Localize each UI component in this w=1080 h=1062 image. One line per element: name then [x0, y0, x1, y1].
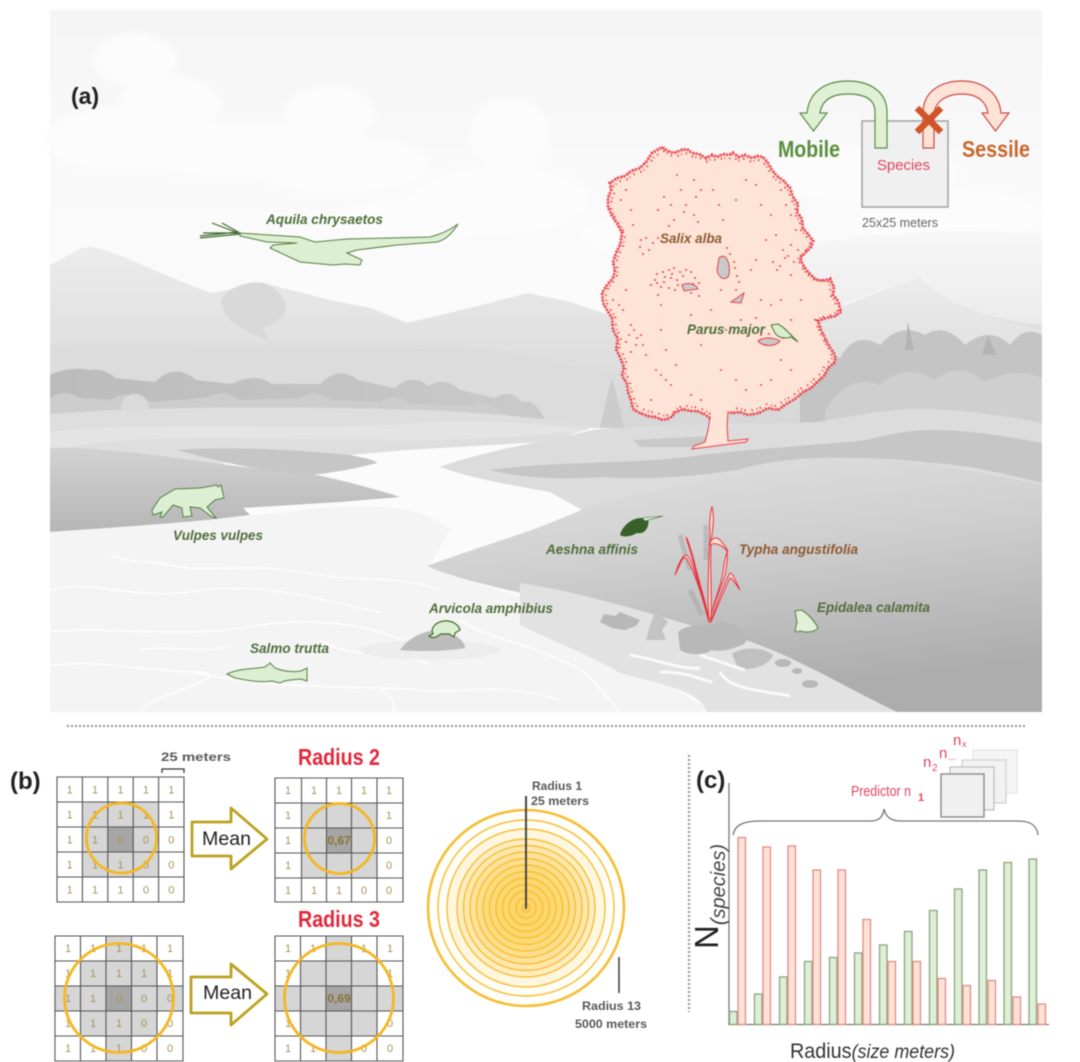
grid: radius 2 output: 1: [285, 785, 291, 797]
grid: radius 2 input: 1: [67, 784, 73, 796]
icon: Parus major bird: [771, 324, 798, 342]
species label: Arvicola amphibius: Arvicola amphibius: [428, 600, 553, 616]
predictor labels: n: [939, 745, 947, 762]
grid: radius 3 output: 1: [361, 943, 367, 955]
grid: radius 2 output: 1: [285, 810, 291, 822]
arrow: mobile: [800, 81, 887, 148]
grid: radius 2 output: 1: [386, 785, 392, 797]
grid: radius 3 output: 1: [285, 1018, 291, 1030]
bar chart: [729, 783, 1049, 1024]
grid: radius 3 input: 0: [167, 993, 173, 1005]
grid: radius 2 output: 1: [285, 860, 291, 872]
arrow: mean radius 3: Mean: [203, 983, 252, 1004]
grid: radius 3 input: 0: [167, 1043, 173, 1055]
icon: vole Arvicola amphibius: [429, 621, 460, 638]
grid: radius 2 input: 1: [168, 784, 174, 796]
grid: radius 3 input: 1: [167, 943, 173, 955]
grid: radius 2 output: 1: [386, 810, 392, 822]
panel label c: (c): [696, 767, 725, 794]
canopy inner speckled edge: [606, 151, 837, 416]
grid: radius 3 input: 0: [167, 1018, 173, 1030]
label: radius 13: [575, 999, 647, 1031]
species label: Typha angustifolia: Typha angustifolia: [739, 541, 858, 557]
grid: radius 2 output: 1: [361, 785, 367, 797]
grid: radius 3 output: 1: [285, 943, 291, 955]
radius 13 pointer: [618, 957, 620, 993]
panel label b: (b): [10, 768, 41, 795]
brace: [733, 809, 1038, 835]
rings: [428, 810, 624, 1006]
grid: radius 3 output: 0: [387, 1018, 393, 1030]
arrow: mean radius 2: [192, 808, 267, 869]
species label: Epidalea calamita: Epidalea calamita: [817, 599, 930, 615]
meadow lighter band: [50, 422, 590, 450]
label: Sessile: Sessile: [962, 136, 1030, 162]
meadow left: [50, 407, 593, 470]
label: radius 13: 5000 meters: [575, 1017, 647, 1031]
radius 1 pointer: [525, 796, 527, 909]
species label: Aquila chrysaetos: Aquila chrysaetos: [265, 211, 383, 227]
grid: radius 2 output: 1: [285, 835, 291, 847]
predictor labels: n: [923, 754, 931, 771]
grid: radius 2 input: 1: [92, 810, 98, 822]
grid: radius 3 input: 1: [90, 993, 96, 1005]
grid: radius 3 output: 0: [361, 1043, 367, 1055]
grid: radius 2 output: [275, 778, 403, 902]
grid: radius 3 output: 0,69: [327, 992, 351, 1006]
grid: radius 2 input: 1: [92, 834, 98, 846]
label: Mobile: Mobile: [778, 136, 840, 162]
predictor labels: 2: [932, 763, 938, 774]
grid: radius 3 input: 0: [141, 993, 147, 1005]
vole rock: [400, 630, 465, 651]
shore strip: [520, 583, 897, 712]
grid: radius 3 input: 1: [90, 968, 96, 980]
y axis label: (species): [708, 844, 730, 925]
grid: radius 3 output: 1: [310, 943, 316, 955]
grid: radius 3 input: 1: [90, 943, 96, 955]
grid: radius 3 output: 1: [285, 1043, 291, 1055]
sky: [50, 10, 1042, 430]
grid: radius 2 output: 1: [285, 885, 291, 897]
grid: radius 2 input: [57, 777, 184, 902]
icon: cattail Typha angustifolia: [675, 507, 740, 622]
species label: Salmo trutta: Salmo trutta: [250, 640, 329, 656]
far mountains: [50, 231, 1042, 430]
tree canopy: [602, 147, 841, 449]
grid: radius 3 output: 0: [387, 1043, 393, 1055]
grid: radius 2 input: 0: [117, 834, 124, 846]
grid: radius 2 input: 1: [117, 884, 124, 896]
grid: radius 3 input: 1: [167, 968, 173, 980]
grid: radius 2 input: 0: [168, 884, 174, 896]
icon: dragonfly Aeshna affinis: [620, 516, 663, 536]
arrow: sessile: [923, 81, 1009, 148]
water shadow: [360, 640, 500, 660]
grid: radius 3 output: 1: [310, 1043, 316, 1055]
species box diagram: [778, 81, 1030, 230]
water base: [50, 428, 1042, 712]
canopy jagged edge: [602, 147, 841, 420]
label: radius 1: [531, 779, 589, 808]
grid: radius 3 input: 0: [141, 1018, 147, 1030]
predictor labels: x: [962, 739, 967, 749]
grid: radius 2 output: 0: [361, 885, 367, 897]
grid: radius 3 input: 0: [116, 993, 122, 1005]
grid: radius 3 input: 1: [116, 943, 122, 955]
grid: radius 2 input: 1: [168, 810, 174, 822]
heading: Radius 2: Radius 2: [298, 744, 380, 770]
tree line left: [50, 369, 548, 430]
species label: Salix alba: Salix alba: [660, 230, 722, 246]
grid: radius 2 input: 1: [117, 810, 124, 822]
conifer: [600, 378, 624, 428]
predictor labels: 1: [918, 792, 924, 804]
grid: radius 3 input: 1: [65, 1043, 71, 1055]
grid: radius 2 input: 1: [67, 884, 73, 896]
concentric radii diagram: [428, 779, 647, 1031]
label: radius 13: Radius 13: [582, 999, 641, 1013]
grid: radius 2 input: 1: [143, 784, 149, 796]
icon: trout Salmo trutta: [227, 663, 307, 683]
arrow: mean radius 2: Mean: [202, 829, 251, 850]
grid: radius 2 input: 1: [117, 784, 124, 796]
grid: radius 3 input: 1: [65, 968, 71, 980]
grid: radius 3 input: 1: [116, 968, 122, 980]
grid: radius 2 output: 0: [386, 860, 392, 872]
clouds: [45, 34, 1045, 255]
grid: radius 2 input: 1: [92, 784, 98, 796]
sessile bars: [738, 838, 1046, 1024]
grid: radius 2 input: 1: [92, 860, 98, 872]
icon: fox Vulpes vulpes: [152, 485, 224, 518]
predictor labels: [851, 732, 967, 804]
grid: radius 3 input: 1: [65, 993, 71, 1005]
grid: radius 2 input: 1: [117, 860, 124, 872]
y axis label: N: [688, 925, 725, 949]
mobile bars: [730, 859, 1036, 1024]
grid: radius 3 input: 1: [116, 1018, 122, 1030]
25 meters scale: 25 meters: [161, 750, 231, 764]
grid: radius 2 output: 0,67: [327, 834, 351, 848]
icon: eagle Aquila chrysaetos: [200, 223, 458, 265]
water ripples: [50, 555, 620, 712]
grid: radius 2 input: 0: [168, 860, 174, 872]
panel label a: (a): [71, 83, 99, 109]
grid: radius 3 input: 1: [116, 1043, 122, 1055]
grid: radius 2 input: 1: [67, 810, 73, 822]
grid: radius 2 output: 1: [336, 785, 342, 797]
axes: [729, 783, 1049, 1024]
grid: radius 3 input: 1: [141, 968, 147, 980]
species plot square: [862, 121, 948, 207]
right near bank: [427, 458, 1042, 712]
panel a: landscape scene: [45, 10, 1045, 712]
grid: radius 3 input: 1: [65, 1018, 71, 1030]
right far bank: [440, 409, 1042, 520]
grid: radius 3 input: 1: [141, 943, 147, 955]
grid: radius 2 input: 0: [168, 834, 174, 846]
grid: radius 3 output: 1: [387, 943, 393, 955]
icon: toad Epidalea calamita: [795, 610, 818, 632]
patch by trunk: [633, 436, 712, 447]
heading: Radius 3: Radius 3: [298, 906, 380, 932]
grid: radius 3 output: 1: [285, 968, 291, 980]
meadow dark patch: [177, 448, 377, 475]
predictor stack: [941, 750, 1017, 817]
grid: radius 3 input: 1: [65, 943, 71, 955]
grid: radius 3 input: 0: [141, 1043, 147, 1055]
right far bank stripe: [490, 430, 1042, 483]
label: Species: Species: [877, 157, 930, 174]
canopy holes: [682, 256, 780, 346]
tree line right: [800, 322, 1042, 430]
grid: radius 2 output: 1: [311, 785, 317, 797]
grid: radius 3 output: [275, 936, 403, 1061]
grid: radius 2 input: 1: [143, 810, 149, 822]
shore foam: [630, 655, 790, 696]
predictor labels: ...: [948, 752, 956, 763]
rocks: [600, 611, 818, 688]
grid: radius 2 output: 0: [386, 835, 392, 847]
label: radius 1: Radius 1: [532, 779, 582, 793]
25 meters scale: [161, 750, 231, 773]
predictor labels: n: [953, 732, 961, 749]
grid: radius 2 input: 1: [92, 884, 98, 896]
grid: radius 2 input: 0: [143, 860, 149, 872]
grid: radius 2 input: 1: [67, 860, 73, 872]
grid: radius 2 output: 1: [336, 885, 342, 897]
grid: radius 3 input: 1: [90, 1043, 96, 1055]
label: plot size: 25x25 meters: [862, 215, 938, 230]
arrow: mean radius 3: [191, 964, 267, 1025]
grid: radius 2 input: 1: [67, 834, 73, 846]
species label: Parus major: Parus major: [687, 321, 766, 337]
grid: radius 3 output: 1: [387, 968, 393, 980]
left bank: [50, 448, 400, 532]
species label: Aeshna affinis: Aeshna affinis: [545, 541, 638, 557]
grid: radius 3 input: [55, 936, 183, 1061]
label: radius 1: 25 meters: [531, 794, 589, 808]
grid: radius 2 output: 0: [386, 885, 392, 897]
tree: Salix alba: [602, 147, 841, 449]
grid: radius 2 output: 1: [311, 885, 317, 897]
lower water: [50, 507, 715, 712]
canopy speckles: [612, 175, 802, 400]
grid: radius 3 input: 1: [90, 1018, 96, 1030]
blocked cross: [917, 108, 941, 132]
grid: radius 2 input: 0: [143, 884, 149, 896]
grid: radius 2 input: 0: [143, 834, 149, 846]
predictor labels: Predictor n: [851, 784, 911, 800]
species label: Vulpes vulpes: Vulpes vulpes: [173, 527, 263, 543]
